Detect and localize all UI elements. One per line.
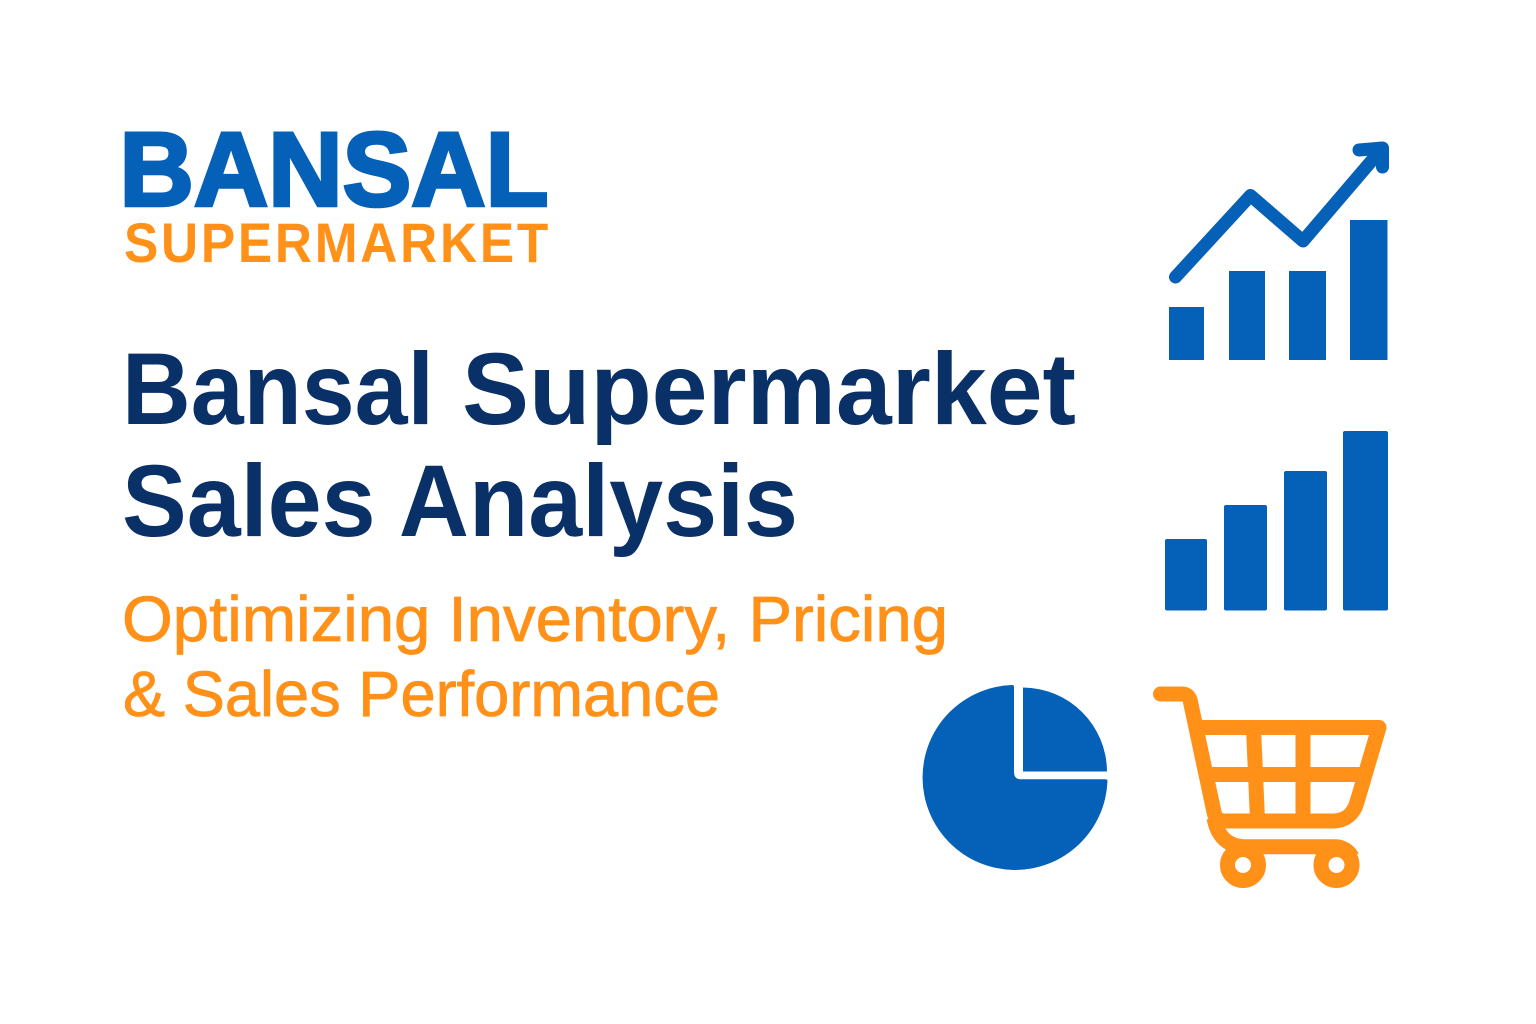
rising trend arrow	[1176, 148, 1382, 277]
title line 1: Supermarket	[462, 332, 1076, 446]
logo word: BANSAL: BANSAL	[120, 112, 548, 228]
title line 1: Bansal	[122, 332, 434, 446]
bars	[1169, 220, 1388, 360]
logo word: SUPERMARKET: SUPERMARKET	[124, 211, 551, 274]
icon: shopping cart	[1160, 694, 1379, 880]
small pie segment	[1023, 688, 1107, 772]
subtitle	[122, 583, 948, 730]
right wheel	[1321, 850, 1352, 880]
logo: Bansal Supermarket	[120, 112, 551, 274]
subtitle line 1: Optimizing Inventory, Pricing	[122, 583, 948, 655]
icon: ascending bar chart	[1165, 431, 1388, 610]
cart base rail	[1214, 818, 1352, 857]
title line 2: Sales Analysis	[122, 444, 798, 558]
cart handle and basket frame	[1160, 694, 1379, 821]
large pie segment	[923, 685, 1108, 870]
icon: bar chart with rising arrow	[1169, 148, 1388, 360]
title line 1	[122, 332, 1076, 446]
basket grid	[1206, 728, 1367, 820]
title	[122, 332, 1076, 558]
subtitle line 2: & Sales Performance	[123, 658, 720, 730]
left wheel	[1228, 850, 1258, 880]
icon: pie chart	[923, 685, 1108, 870]
